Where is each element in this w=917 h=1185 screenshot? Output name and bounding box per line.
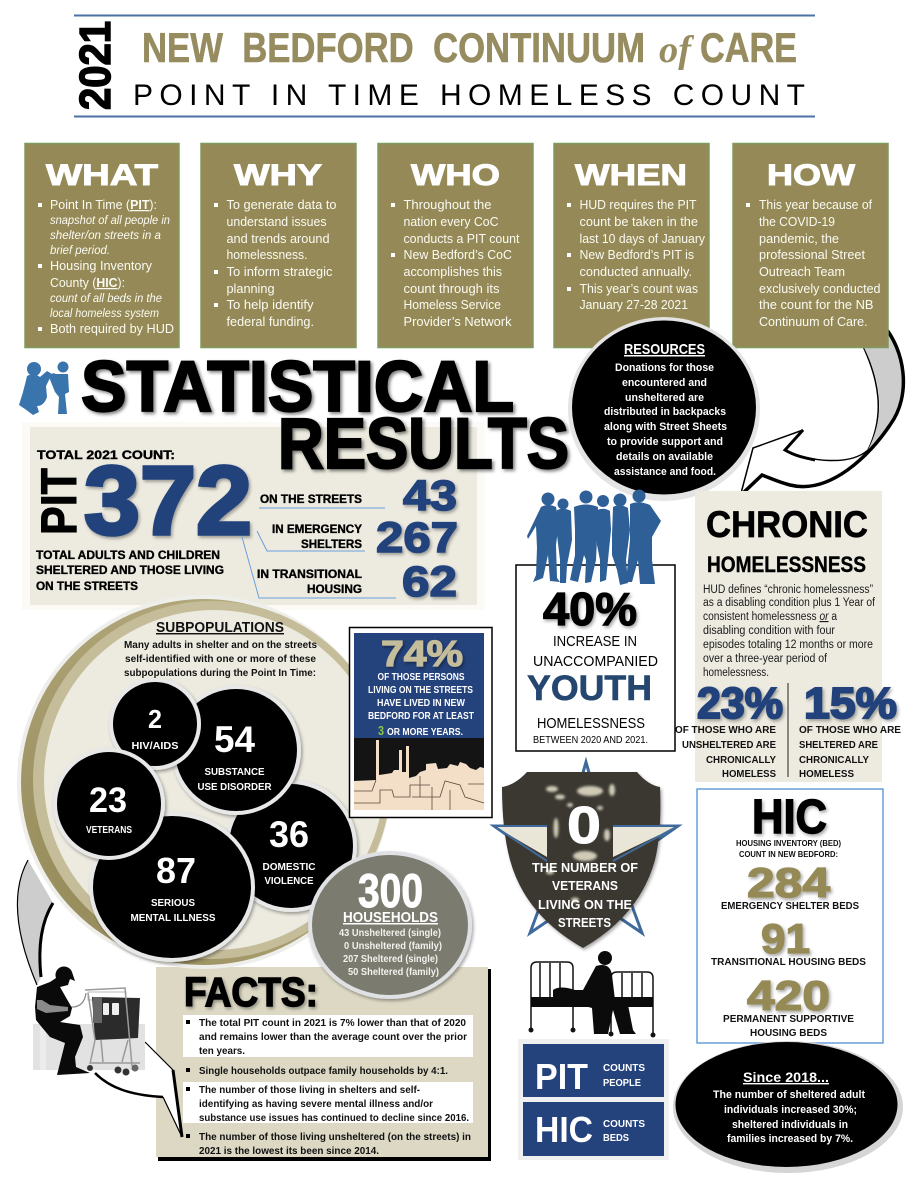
circle: veterans: 23	[89, 781, 127, 820]
subpopulations intro: Many adults in shelter and on the streets	[124, 639, 317, 651]
bullets: HOW: professional Street	[759, 248, 866, 262]
panel: HIC inventory	[697, 789, 883, 1043]
on the streets: 43	[403, 472, 457, 520]
bullets: HOW: the count for the NB	[759, 298, 874, 312]
PIT counts people	[523, 1044, 664, 1097]
bullets: WHEN: New Bedford’s PIT is	[580, 248, 694, 262]
bullets: WHAT: brief period.	[50, 243, 110, 257]
arrow: curved callout to homeless figure	[17, 860, 53, 985]
year 2021 rotated: 2021	[71, 21, 120, 110]
bullets: WHO: Throughout the	[404, 198, 492, 212]
bullets: WHY: planning	[226, 282, 275, 296]
bullets: HOW: pandemic, the	[759, 232, 839, 246]
emergency beds	[721, 859, 859, 912]
emergency beds: 284	[747, 859, 831, 906]
shield splatter	[546, 784, 615, 902]
HIC counts beds: BEDS	[603, 1132, 629, 1144]
heading: STATISTICAL RESULTS	[81, 348, 569, 484]
heading: WHAT: WHAT	[46, 159, 158, 192]
facts bullets: and remains lower than the average count over the prior	[199, 1031, 467, 1043]
panel: youth homelessness	[516, 490, 675, 751]
in transitional housing	[242, 537, 457, 606]
74 percent text: BEDFORD FOR AT LEAST	[368, 711, 474, 722]
callout: resources	[568, 317, 760, 501]
youth: YOUTH	[527, 669, 652, 708]
homelessness heading: HOMELESSNESS	[707, 552, 866, 577]
arrow: speech tail into facts panel	[95, 1042, 182, 1137]
bullets: WHY: To help identify	[226, 298, 314, 312]
panel: WHO	[378, 144, 533, 348]
icon: adult and child silhouette	[19, 362, 69, 415]
74 percent text: OR MORE YEARS.	[387, 727, 463, 738]
subtitle: POINT IN TIME HOMELESS COUNT	[133, 79, 805, 112]
bullets: HOW: This year because of	[759, 198, 873, 212]
HIC counts beds	[523, 1102, 664, 1156]
households breakdown	[339, 928, 442, 978]
bullets: WHAT: local homeless system	[50, 306, 159, 320]
facts bullets: substance use issues has continued to decline since 2016.	[199, 1112, 469, 1124]
stat: 15 percent	[799, 679, 901, 780]
subpopulations intro: self-identified with one or more of these	[125, 653, 316, 665]
increase text: INCREASE IN	[553, 633, 637, 650]
in transitional housing: IN TRANSITIONAL	[257, 569, 362, 581]
subpopulations heading: SUBPOPULATIONS	[156, 620, 284, 636]
panel: 74 percent	[350, 628, 492, 818]
transitional beds	[711, 915, 866, 968]
description: ON THE STREETS	[36, 581, 138, 593]
since 2018 text: sheltered individuals in	[732, 1119, 848, 1131]
resources heading: RESOURCES	[624, 341, 705, 358]
stat: 23 percent: CHRONICALLY	[706, 754, 776, 766]
panel: subpopulations	[17, 595, 391, 969]
panel: WHY	[201, 144, 356, 348]
resources text: along with Street Sheets	[604, 421, 727, 433]
zero: 0	[567, 797, 601, 855]
arrow: curved callout from HOW to resources	[740, 325, 903, 497]
74 percent text: 3	[378, 723, 384, 738]
stat: 15 percent: HOMELESS	[799, 768, 854, 780]
circle: domestic violence: VIOLENCE	[264, 875, 314, 887]
description: SHELTERED AND THOSE LIVING	[36, 565, 224, 577]
stat: 15 percent: CHRONICALLY	[799, 754, 869, 766]
74 percent text	[368, 672, 474, 738]
bullets: WHO	[391, 198, 520, 329]
in emergency shelters	[257, 514, 458, 562]
bullets: WHAT: count of all beds in the	[50, 291, 162, 305]
total label: TOTAL 2021 COUNT:	[37, 448, 175, 462]
person silhouette	[35, 966, 90, 1075]
bullets: WHY: and trends around	[226, 232, 330, 246]
in emergency shelters: IN EMERGENCY	[272, 524, 362, 536]
bullets: WHY: To inform strategic	[226, 265, 332, 279]
shield	[502, 772, 660, 948]
HIC subheading	[736, 838, 841, 859]
chronic definition: disabling condition with four	[703, 625, 835, 637]
bullets: WHO: Homeless Service	[404, 298, 501, 312]
in emergency shelters: SHELTERS	[301, 539, 362, 551]
circle: domestic violence: DOMESTIC	[262, 861, 316, 873]
city skyline	[354, 740, 484, 810]
circle: HIV/AIDS: HIV/AIDS	[132, 740, 178, 752]
chronic definition: over a three-year period of	[703, 653, 828, 665]
panel: veterans shield	[494, 762, 678, 948]
households heading: HOUSEHOLDS	[343, 909, 438, 926]
chronic definition	[703, 584, 876, 679]
bullets: WHAT: Housing Inventory	[50, 259, 153, 273]
bullets: WHEN: HUD requires the PIT	[580, 198, 697, 212]
74 percent text: OF THOSE PERSONS	[378, 672, 465, 683]
stat: 15 percent: 15%	[804, 679, 897, 728]
main title: of: of	[659, 29, 694, 71]
since 2018 text	[713, 1089, 865, 1145]
resources text: encountered and	[622, 377, 707, 389]
veterans text: VETERANS	[552, 878, 618, 893]
veterans text: THE NUMBER OF	[532, 860, 638, 875]
resources text	[604, 362, 727, 478]
resources text: distributed in backpacks	[604, 406, 726, 418]
in transitional housing: 62	[402, 558, 457, 606]
bullets: WHAT: Both required by HUD	[50, 322, 174, 336]
HIC heading: HIC	[752, 791, 827, 844]
star outline	[494, 762, 678, 933]
panel: WHAT	[25, 144, 179, 348]
since 2018 text: The number of sheltered adult	[713, 1089, 865, 1101]
transitional beds: TRANSITIONAL HOUSING BEDS	[711, 956, 866, 968]
on the streets: ON THE STREETS	[260, 494, 362, 506]
circle: substance use disorder	[171, 685, 301, 815]
circle: substance use disorder: 54	[214, 719, 255, 760]
subpopulations intro: subpopulations during the Point In Time:	[124, 667, 316, 679]
bullets: WHEN: count be taken in the	[580, 215, 698, 229]
date range: BETWEEN 2020 AND 2021.	[533, 735, 648, 746]
shopping cart	[70, 988, 140, 1076]
heading: WHEN: WHEN	[575, 159, 687, 192]
facts bullets: ten years.	[199, 1045, 245, 1057]
veterans text: STREETS	[558, 915, 611, 930]
in transitional housing: HOUSING	[307, 584, 362, 596]
facts bullets: identifying as having severe mental illness and/or	[199, 1098, 433, 1110]
panel: PIT and HIC legend	[518, 1039, 669, 1160]
facts bullets: 2021 is the lowest its been since 2014.	[199, 1145, 379, 1157]
circle: domestic violence	[225, 780, 357, 912]
circle: serious mental illness	[89, 812, 255, 962]
title block	[71, 16, 815, 116]
bullets: HOW: the COVID-19	[759, 215, 835, 229]
circle: HIV/AIDS: 2	[148, 704, 162, 734]
star wings	[494, 826, 678, 857]
increase text: UNACCOMPANIED	[533, 653, 658, 670]
circle: 300 households	[308, 851, 472, 999]
resources text: to provide support and	[607, 436, 723, 448]
74 percent number: 74%	[381, 633, 463, 674]
permanent beds	[723, 972, 854, 1039]
74 percent text: LIVING ON THE STREETS	[368, 685, 473, 696]
heading: STATISTICAL RESULTS: STATISTICAL	[81, 348, 514, 427]
bullets: WHAT: snapshot of all people in	[50, 213, 170, 227]
chronic definition: HUD defines “chronic homelessness”	[703, 584, 873, 596]
bullets: HOW	[746, 198, 881, 329]
bullets: WHEN: January 27-28 2021	[580, 298, 688, 312]
chronic definition: consistent homelessness or a	[703, 611, 838, 623]
heading: WHO: WHO	[411, 159, 500, 192]
icon: person sitting on bed	[528, 951, 656, 1038]
resources text: Donations for those	[615, 362, 714, 374]
panel: PIT total	[22, 422, 485, 610]
stat: 15 percent: OF THOSE WHO ARE	[799, 724, 901, 736]
transitional beds: 91	[761, 915, 810, 962]
bullets: WHY	[214, 198, 337, 329]
since 2018 text: individuals increased 30%;	[724, 1104, 857, 1116]
main title: NEW BEDFORD CONTINUUM	[142, 24, 645, 71]
person arm	[37, 1000, 68, 1013]
HIC counts beds: HIC	[535, 1109, 593, 1150]
PIT counts people: COUNTS	[603, 1062, 645, 1074]
permanent beds: HOUSING BEDS	[750, 1027, 827, 1039]
circle: HIV/AIDS	[109, 678, 201, 770]
circle: 300 households: 300	[358, 864, 423, 917]
increase text	[533, 633, 658, 670]
icon: homeless person with cart	[33, 966, 145, 1076]
permanent beds: PERMANENT SUPPORTIVE	[723, 1013, 854, 1025]
veterans text: LIVING ON THE	[538, 897, 632, 912]
circle: veterans	[53, 748, 165, 860]
bullets: WHO: conducts a PIT count	[404, 232, 520, 246]
circle: serious mental illness: MENTAL ILLNESS	[130, 912, 216, 924]
resources text: details on available	[616, 451, 713, 463]
panel: HOW	[733, 144, 888, 348]
circle: veterans: VETERANS	[86, 824, 132, 836]
circle: serious mental illness: 87	[156, 850, 196, 891]
bullets: HOW: exclusively conducted	[759, 282, 881, 296]
main title: care: CARE	[700, 24, 797, 71]
facts bullets: The number of those living unsheltered (on the streets) in	[199, 1131, 471, 1143]
bullets: WHO: nation every CoC	[404, 215, 498, 229]
stat: 15 percent: SHELTERED ARE	[799, 739, 878, 751]
panel: facts	[156, 967, 491, 1161]
PIT rotated: PIT	[31, 468, 87, 535]
stat: 23 percent	[675, 679, 783, 780]
chronic heading: CHRONIC	[706, 504, 868, 545]
panel: WHEN	[554, 144, 709, 348]
HIC subheading: COUNT IN NEW BEDFORD:	[739, 849, 838, 859]
on the streets	[259, 472, 457, 520]
since 2018 text: families increased by 7%.	[727, 1133, 853, 1145]
facts bullets: Single households outpace family households by 4:1.	[199, 1065, 448, 1077]
HIC counts beds: COUNTS	[603, 1118, 645, 1130]
panel: chronic homelessness	[675, 491, 901, 782]
bullets: WHAT: shelter/on streets in a	[50, 228, 161, 242]
bullets: WHAT: County (HIC):	[50, 276, 125, 290]
chronic definition: as a disabling condition plus 1 Year of	[703, 597, 876, 609]
resources text: assistance and food.	[614, 466, 716, 478]
description: TOTAL ADULTS AND CHILDREN	[36, 550, 220, 562]
subpopulations intro	[124, 639, 317, 679]
since 2018 heading: Since 2018...	[743, 1069, 829, 1085]
bullets: WHEN	[567, 198, 706, 312]
bullets: WHO: accomplishes this	[404, 265, 502, 279]
bullets: WHAT	[38, 198, 174, 336]
heading: HOW: HOW	[767, 159, 856, 192]
chronic definition: episodes totaling 12 months or more	[703, 639, 873, 651]
emergency beds: EMERGENCY SHELTER BEDS	[721, 900, 859, 912]
PIT counts people: PEOPLE	[603, 1077, 641, 1089]
number 372: 372	[84, 446, 252, 555]
description	[36, 550, 224, 593]
icon: group silhouette	[527, 490, 661, 585]
facts heading: FACTS:	[184, 969, 318, 1015]
households breakdown: 0 Unsheltered (family)	[344, 941, 442, 952]
circle: substance use disorder: USE DISORDER	[198, 781, 272, 793]
circle: domestic violence: 36	[269, 814, 309, 855]
facts bullets	[186, 1017, 471, 1157]
bullets: WHO: Provider’s Network	[404, 315, 512, 329]
in emergency shelters: 267	[376, 514, 458, 562]
74 percent text: HAVE LIVED IN NEW	[377, 698, 466, 709]
HIC subheading: HOUSING INVENTORY (BED)	[736, 838, 841, 848]
bullets: WHO: count through its	[404, 282, 500, 296]
bullets: WHEN: last 10 days of January	[580, 232, 706, 246]
bullets: WHY: federal funding.	[226, 315, 314, 329]
bullets: WHEN: conducted annually.	[580, 265, 692, 279]
veterans text	[532, 860, 638, 930]
bullets: WHAT: Point In Time (PIT):	[50, 198, 157, 212]
facts bullets: The number of those living in shelters and self-	[199, 1084, 420, 1096]
households breakdown: 207 Sheltered (single)	[343, 954, 438, 965]
40 percent: 40%	[543, 583, 637, 635]
permanent beds: 420	[747, 972, 830, 1019]
heading: STATISTICAL RESULTS: RESULTS	[278, 405, 569, 484]
households breakdown: 43 Unsheltered (single)	[339, 928, 441, 939]
stat: 23 percent: UNSHELTERED ARE	[682, 739, 776, 751]
homelessness: HOMELESSNESS	[537, 716, 645, 732]
households breakdown: 50 Sheltered (family)	[348, 967, 439, 978]
resources text: unsheltered are	[625, 392, 704, 404]
bullets: WHY: understand issues	[226, 215, 326, 229]
facts bullets: The total PIT count in 2021 is 7% lower than that of 2020	[199, 1017, 466, 1029]
stat: 23 percent: 23%	[697, 679, 783, 728]
stat: 23 percent: OF THOSE WHO ARE	[675, 724, 776, 736]
bullets: HOW: Continuum of Care.	[759, 315, 868, 329]
circle: serious mental illness: SERIOUS	[151, 897, 195, 909]
callout: since 2018	[673, 1041, 903, 1173]
bullets: WHO: New Bedford’s CoC	[404, 248, 512, 262]
bullets: WHY: To generate data to	[226, 198, 337, 212]
bullets: WHEN: This year’s count was	[580, 282, 698, 296]
bullets: WHY: homelessness.	[226, 248, 308, 262]
chronic definition: homelessness.	[703, 667, 769, 679]
stat: 23 percent: HOMELESS	[722, 768, 776, 780]
circle: substance use disorder: SUBSTANCE	[204, 766, 264, 778]
bullets: HOW: Outreach Team	[759, 265, 845, 279]
PIT counts people: PIT	[535, 1056, 588, 1097]
heading: WHY: WHY	[234, 159, 322, 192]
